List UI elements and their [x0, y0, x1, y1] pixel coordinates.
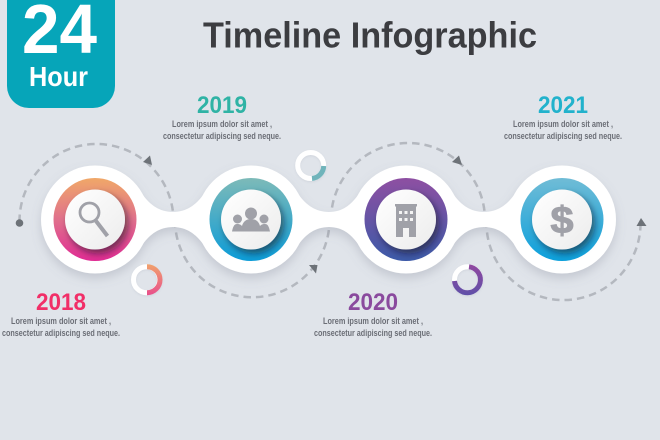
text block: 2020: consectetur adipiscing sed neque. — [314, 328, 432, 339]
text block: 2018 — [2, 289, 120, 339]
badge: 24 Hour: Hour — [29, 61, 88, 92]
text block: 2021: consectetur adipiscing sed neque. — [504, 131, 622, 142]
text block: 2020: Lorem ipsum dolor sit amet , — [323, 316, 423, 327]
icon: magnifier — [80, 203, 108, 236]
text block: 2020 — [314, 289, 432, 339]
text block: 2018: consectetur adipiscing sed neque. — [2, 328, 120, 339]
title: Timeline Infographic — [203, 14, 537, 56]
icon: people — [232, 208, 270, 232]
white timeline track — [41, 166, 616, 274]
text block: 2019: consectetur adipiscing sed neque. — [163, 131, 281, 142]
donut 2019 — [298, 152, 324, 178]
arrow 1 — [143, 156, 152, 165]
text block: 2020: 2020 — [348, 289, 398, 316]
node: search — [54, 178, 136, 261]
text block: 2019 — [163, 92, 281, 142]
arrow 3 — [452, 156, 462, 165]
arrow 2 — [309, 265, 318, 274]
node: dollar — [520, 178, 604, 261]
route start dot — [16, 219, 23, 227]
text block: 2021: 2021 — [538, 92, 588, 119]
text block: 2018: 2018 — [36, 289, 86, 316]
icon: building — [395, 204, 417, 237]
node: people — [210, 178, 292, 261]
donut 2018 — [134, 267, 160, 293]
arrow 4 — [636, 218, 646, 226]
icon: dollar: $ — [550, 200, 574, 242]
dashed route — [19, 143, 640, 300]
badge: 24 Hour — [7, 0, 115, 108]
text block: 2018: Lorem ipsum dolor sit amet , — [11, 316, 111, 327]
text block: 2021 — [504, 92, 622, 142]
donut 2020 — [454, 267, 480, 293]
text block: 2019: Lorem ipsum dolor sit amet , — [172, 119, 272, 130]
text block: 2021: Lorem ipsum dolor sit amet , — [513, 119, 613, 130]
node: building — [364, 178, 448, 261]
text block: 2019: 2019 — [197, 92, 247, 119]
